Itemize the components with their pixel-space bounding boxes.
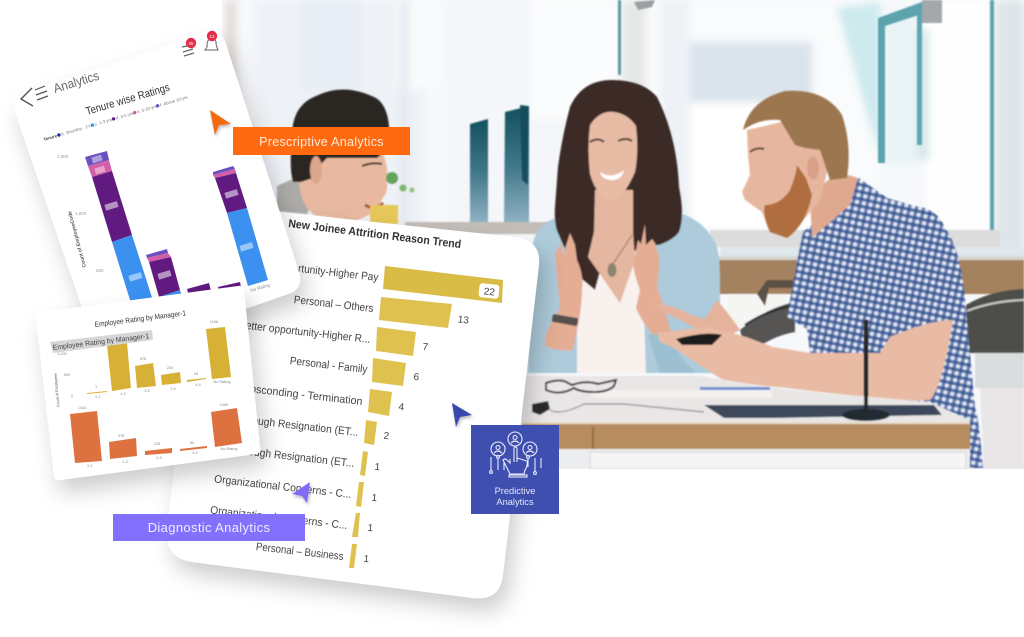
bar category labels: Absconding - Termination [242, 382, 363, 408]
orange chart labels [78, 403, 237, 468]
arrow: purple cursor [292, 482, 310, 503]
gold chart labels: 500 [64, 373, 70, 377]
bar value labels [363, 283, 500, 565]
gold chart labels: 1,000 [57, 352, 67, 356]
person: right man [653, 91, 983, 468]
chart legend: e. 5-10 yrs [136, 104, 157, 114]
gold chart labels: 0-1 [95, 395, 101, 399]
label: Diagnostic Analytics: Diagnostic Analytics [148, 520, 270, 535]
gold chart labels [54, 320, 230, 407]
bar value labels: 1 [367, 523, 374, 534]
background photo: three colleagues in a meeting [222, 0, 1024, 469]
gold chart labels: 4-5 [195, 383, 201, 387]
gold chart labels: 234 [167, 366, 173, 370]
y axis labels: 1,500 [57, 154, 69, 159]
gold chart labels: 3-5 [144, 389, 150, 393]
orange chart labels: 378 [118, 434, 124, 438]
bar category labels: Better opportunity-Higher R... [239, 319, 371, 346]
bar category labels: Through Resignation (ET... [232, 444, 355, 470]
chart legend [43, 95, 188, 142]
chart heading: New Joinee Attrition Reason Trend [288, 218, 462, 251]
meeting table with glasses and tablet [522, 320, 970, 469]
orange bar chart [70, 408, 242, 463]
stacked bar chart [85, 151, 268, 316]
gold chart labels: 578 [140, 357, 146, 361]
tooltip: Employee Rating by Manager-1 [52, 331, 150, 352]
icon: bell with badge [205, 31, 218, 50]
panel: New Joinee Attrition Reason Trend [167, 204, 539, 598]
bar value labels: 13 [457, 314, 470, 327]
icon: bell with badge: 13 [209, 34, 215, 39]
bar value labels: 1 [371, 493, 378, 504]
orange chart labels: 0-1 [87, 464, 93, 468]
chart title: Tenure wise Ratings [84, 82, 172, 118]
bar category labels: Organizational Concerns - C... [214, 473, 352, 501]
chart legend: b. 3months - 1Yr [61, 123, 93, 137]
chart legend: f. Above 10 yrs [159, 95, 188, 107]
icon: hand selecting people [490, 432, 541, 477]
gold chart labels: 1-2 [120, 392, 126, 396]
bar value labels: 6 [413, 372, 420, 383]
y axis labels: 1,000 [75, 211, 87, 216]
person: woman [528, 80, 720, 373]
arrow: navy cursor [452, 403, 472, 427]
gold chart labels: Count of Employees [54, 373, 60, 407]
orange chart labels: 125 [154, 442, 160, 446]
panel: Employee Rating by Manager-1 [36, 286, 260, 480]
y axis labels: Count of EmployeeCode [67, 210, 88, 268]
bar category labels [210, 257, 379, 563]
label: Prescriptive Analytics: Prescriptive Analytics [259, 135, 384, 149]
gold bar chart [87, 327, 231, 394]
gold chart labels: No Rating [214, 380, 230, 384]
y axis labels: 500 [96, 268, 104, 273]
header title: Analytics [51, 68, 101, 96]
chart legend: c. 1-3 yrs [94, 117, 113, 127]
person: left man [277, 89, 414, 224]
bar category labels: Through Resignation (ET... [236, 413, 359, 439]
label: Prescriptive Analytics [233, 127, 410, 155]
gold chart labels: 1166 [210, 320, 218, 324]
orange chart labels: 1065 [220, 403, 228, 407]
orange chart labels: 90 [190, 441, 194, 445]
gold chart labels: 1 [95, 385, 97, 389]
gold chart labels: 28 [194, 372, 198, 376]
bar value tags [91, 155, 254, 282]
label: Diagnostic Analytics [113, 514, 305, 541]
bar value labels: 22 [483, 286, 496, 299]
orange chart labels: 2-3 [156, 456, 162, 460]
card text: Predictive [495, 486, 535, 496]
bar value labels: 2 [383, 431, 390, 442]
chart legend: d. 3-5 yrs [115, 111, 134, 121]
bar value labels: 4 [398, 402, 405, 413]
bar category labels: Personal - Family [289, 355, 368, 376]
card: Predictive Analytics [471, 425, 559, 514]
chart legend: Tenure [43, 133, 58, 142]
orange chart labels: 1-2 [122, 460, 128, 464]
bar value labels: 1 [374, 462, 381, 473]
bar category labels: Organizational Concerns - C... [210, 504, 348, 532]
gold chart labels: 0 [71, 394, 73, 398]
orange chart labels: 3-4 [192, 451, 198, 455]
panel: Tenure wise Ratings [14, 31, 300, 360]
horizontal bar chart [349, 266, 503, 568]
icon: checklist with badge [182, 38, 196, 56]
y axis labels [57, 154, 104, 273]
icon: checklist with badge: 25 [188, 41, 194, 46]
bar category labels: Better opportunity-Higher Pay [246, 257, 379, 284]
arrow: orange cursor [210, 110, 231, 135]
card: Predictive Analytics: Analytics [496, 497, 534, 507]
orange chart labels: No Rating [221, 447, 237, 451]
orange chart labels: 1444 [78, 406, 86, 410]
back arrow and menu icon [21, 86, 48, 106]
x axis label: No Rating [250, 282, 271, 293]
bar value labels: 7 [422, 342, 429, 353]
bar value labels: 1 [363, 554, 370, 565]
panel title: Employee Rating by Manager-1 [94, 308, 187, 329]
bar category labels: Personal – Others [293, 294, 374, 315]
gold chart labels: 3-4 [170, 387, 176, 391]
bar category labels: Personal – Business [255, 541, 344, 563]
